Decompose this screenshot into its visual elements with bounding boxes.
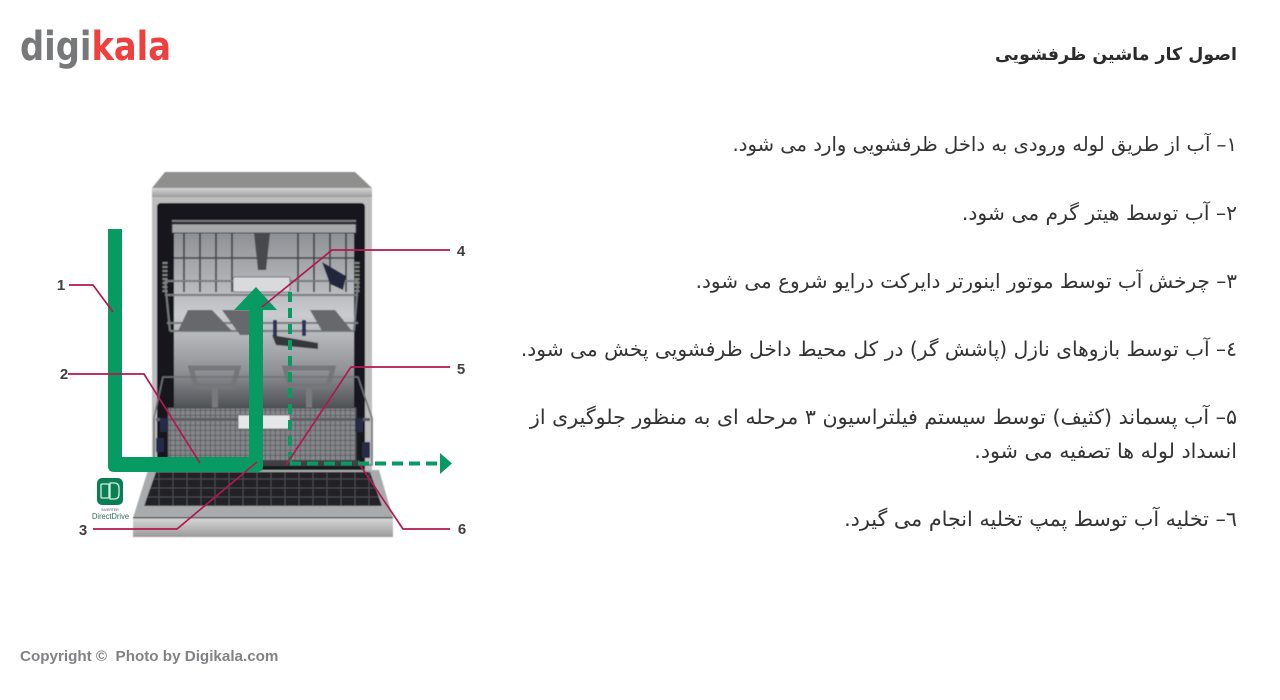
dashed vertical [288,292,292,462]
rear wall [174,232,354,417]
logo: digikala: digikala [20,24,171,70]
step 5 text [529,404,1237,463]
drain dashed arrow [290,292,452,474]
lower rack basket [168,408,356,464]
lower area [170,416,360,472]
water inlet arrow [108,229,277,472]
top rail [172,220,356,233]
step 2 text: ۲– آب توسط هیتر گرم می شود. [962,201,1237,225]
callout numbers: 3 [79,522,87,539]
lower handle label [238,415,290,429]
step 5 text: ۵– آب پسماند (کثیف) توسط سیستم فیلتراسیون ۳ مرحله ای به منظور جلوگیری از [530,405,1237,429]
step 1 text: ۱– آب از طریق لوله ورودی به داخل ظرفشویی وارد می شود. [732,133,1237,156]
dark clip [322,262,346,290]
machine top panel [152,172,372,188]
icon: direct drive [92,478,129,521]
step 6 text: ٦– تخلیه آب توسط پمپ تخلیه انجام می گیرد. [844,507,1237,531]
blue clips [273,320,306,336]
upper handle label [233,277,290,292]
upper spray tube [254,233,270,270]
upper rack [165,262,358,331]
cabinet [152,197,372,472]
callout numbers: 2 [60,366,68,383]
callout lines [68,250,450,529]
step 3 text: ۳– چرخش آب توسط موتور اینورتر دایرکت درایو شروع می شود. [696,269,1237,293]
spray arm [272,335,318,349]
lower rack clips [156,418,370,458]
dashed horizontal [290,462,441,466]
upper rack cups [178,310,352,335]
lower rack frame [154,377,372,465]
callout numbers: 6 [458,521,466,538]
step 4 text: ٤– آب توسط بازوهای نازل (پاشش گر) در کل محیط داخل ظرفشویی پخش می شود. [521,337,1237,361]
title: اصول کار ماشین ظرفشویی [995,45,1237,65]
top front strip [152,188,372,197]
lower rack handles [191,368,333,386]
callout numbers: 4 [457,243,466,260]
footer copyright: Copyright © Photo by Digikala.com [20,648,278,665]
callout numbers: 5 [457,361,465,378]
door front strip [133,518,393,537]
callout numbers: 1 [57,277,65,294]
step 5 text: انسداد لوله ها تصفیه می شود. [974,439,1237,463]
icon: direct drive: INVERTER [101,508,119,512]
dishwasher diagram [57,171,466,539]
icon: direct drive: DirectDrive [92,511,129,521]
drain arrow head [440,453,452,474]
machine photo [133,172,393,537]
inner cavity [157,203,365,473]
door inner [133,470,393,518]
callout numbers [57,243,466,539]
